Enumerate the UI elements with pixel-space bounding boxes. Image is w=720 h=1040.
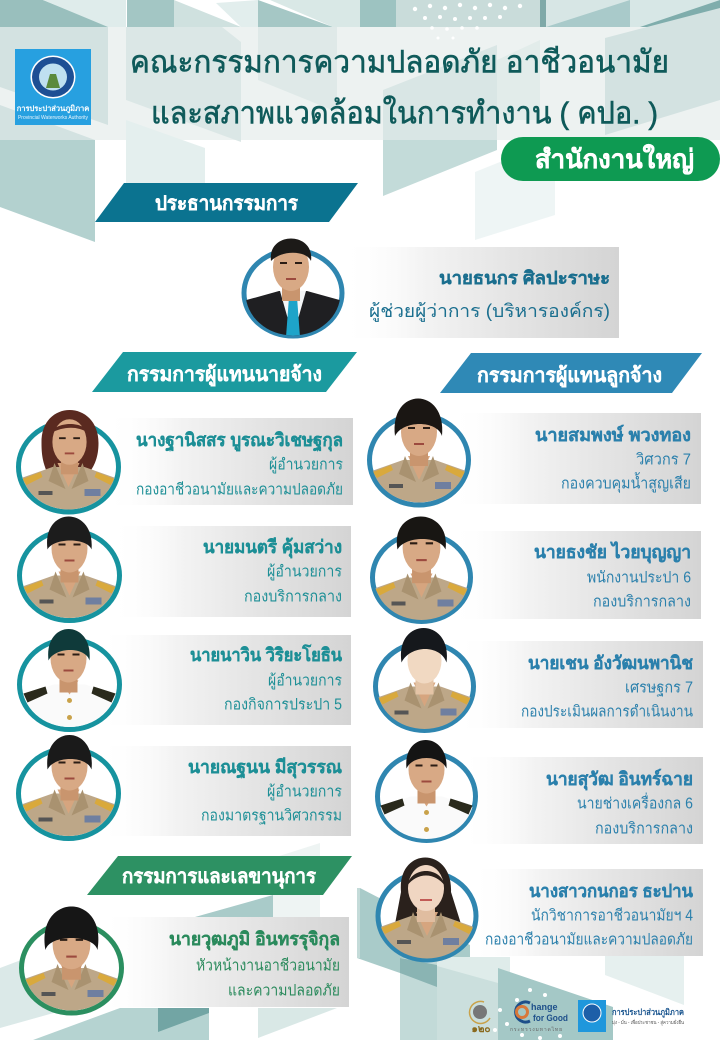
card: secretary: หัวหน้างานอาชีวอนามัย: [196, 958, 340, 974]
logo: Provincial Waterworks Authority: [15, 49, 91, 125]
title: [130, 44, 669, 130]
logo: Provincial Waterworks Authority: การประปาส่วนภูมิภาค: [17, 104, 89, 114]
card: employee 1: กองควบคุมน้ำสูญเสีย: [561, 472, 691, 494]
card: employer 1: [18, 410, 353, 513]
card: employee 3: เศรษฐกร 7: [625, 680, 693, 696]
card: employee 4: นายสุวัฒ อินทร์ฉาย: [546, 768, 693, 791]
card: employer 4: นายณฐนน มีสุวรรณ: [188, 757, 342, 779]
card: employer 4: ผู้อำนวยการ: [267, 784, 342, 802]
card: employee 5: กองอาชีวอนามัยและความปลอดภัย: [485, 932, 693, 948]
card: employer 1: ผู้อำนวยการ: [269, 456, 343, 474]
card: employer 3: [20, 629, 351, 730]
dots pattern: [413, 3, 562, 1040]
card: chairman: นายธนกร ศิลปะราษะ: [439, 268, 610, 288]
portrait: [22, 410, 114, 510]
footer logos: [470, 1000, 685, 1035]
card: secretary: [22, 906, 349, 1014]
card: employee 4: กองบริการกลาง: [595, 820, 693, 838]
card: employee 2: [372, 516, 701, 624]
banner: employer representatives: [92, 352, 357, 392]
badge: head office: [501, 137, 720, 181]
card: employee 2: กองบริการกลาง: [593, 594, 691, 610]
banner: committee and secretary: กรรมการและเลขานุการ: [122, 866, 316, 889]
card: chairman: [243, 238, 619, 339]
logo: Provincial Waterworks Authority: Provincial Waterworks Authority: [18, 115, 89, 121]
card: chairman: ผู้ช่วยผู้ว่าการ (บริหารองค์กร): [369, 301, 610, 322]
logo: anniversary emblem: [470, 1001, 491, 1035]
card: employer 3: ผู้อำนวยการ: [268, 672, 342, 690]
card: employee 4: นายช่างเครื่องกล 6: [577, 792, 693, 812]
logo: Change for Good: กระทรวงมหาดไทย: [510, 1026, 562, 1033]
card: employee 3: กองประเมินผลการดำเนินงาน: [521, 704, 693, 720]
card: employer 2: ผู้อำนวยการ: [267, 564, 342, 582]
card: employee 5: นางสาวกนกอร ธะปาน: [529, 881, 694, 901]
logo: PWA: มุ่ง - มั่น - เพื่อประชาชน - สู่ความยั่งยืน: [612, 1019, 685, 1026]
logo: Change for Good: [510, 1002, 568, 1033]
card: employee 2: นายธงชัย ไวยบุญญา: [534, 541, 691, 564]
card: employee 1: นายสมพงษ์ พวงทอง: [535, 424, 691, 445]
portrait: chairman: [243, 238, 343, 339]
card: employee 5: นักวิชาการอาชีวอนามัยฯ 4: [531, 908, 693, 924]
card: employer 1: กองอาชีวอนามัยและความปลอดภัย: [136, 482, 343, 498]
portrait: [381, 858, 473, 958]
banner: chairman: [95, 183, 358, 222]
card: employer 2: กองบริการกลาง: [244, 588, 342, 606]
logo: PWA: [578, 1000, 685, 1032]
logo: Change for Good: hange: [531, 1002, 558, 1012]
badge: head office: สำนักงานใหญ่: [535, 144, 694, 175]
portrait: [26, 906, 118, 1010]
banner: committee and secretary: [87, 856, 352, 895]
card: secretary: และความปลอดภัย: [228, 982, 340, 1000]
logo: PWA: การประปาส่วนภูมิภาค: [612, 1007, 684, 1018]
portrait: [373, 398, 465, 502]
portrait: [24, 516, 116, 618]
card: employer 1: นางฐานิสสร บูรณะวิเชษฐกุล: [136, 430, 343, 452]
card: employee 2: พนักงานประปา 6: [587, 570, 691, 586]
card: employee 4: [376, 740, 703, 844]
card: secretary: นายวุฒภูมิ อินทรรุจิกุล: [169, 929, 340, 951]
card: employee 3: นายเชน อังวัฒนพานิช: [528, 653, 693, 673]
logo: Change for Good: for Good: [533, 1013, 568, 1023]
banner: employer representatives: กรรมการผู้แทนนายจ้าง: [127, 363, 322, 388]
banner: employee representatives: กรรมการผู้แทนลูกจ้าง: [477, 364, 662, 389]
title: และสภาพแวดล้อมในการทำงาน ( คปอ. ): [151, 96, 658, 130]
portrait: [24, 629, 116, 727]
portrait: [378, 628, 470, 729]
portrait: [22, 735, 114, 836]
portrait: [376, 516, 468, 620]
card: employee 5: [377, 858, 703, 962]
banner: employee representatives: [440, 353, 702, 393]
card: employer 4: กองมาตรฐานวิศวกรรม: [201, 808, 342, 824]
card: employee 1: [369, 398, 701, 506]
portrait: [380, 740, 472, 839]
card: employer 2: [20, 516, 351, 622]
card: employee 1: วิศวกร 7: [636, 452, 691, 468]
banner: chairman: ประธานกรรมการ: [155, 193, 298, 215]
card: employer 4: [18, 735, 351, 840]
card: employee 3: [374, 628, 703, 732]
card: employer 3: นายนาวิน วิริยะโยธิน: [190, 644, 343, 665]
logo: anniversary emblem: ๑๒๐: [471, 1024, 491, 1035]
card: employer 2: นายมนตรี คุ้มสว่าง: [203, 537, 342, 559]
card: employer 3: กองกิจการประปา 5: [224, 696, 342, 714]
title: คณะกรรมการความปลอดภัย อาชีวอนามัย: [130, 44, 669, 80]
